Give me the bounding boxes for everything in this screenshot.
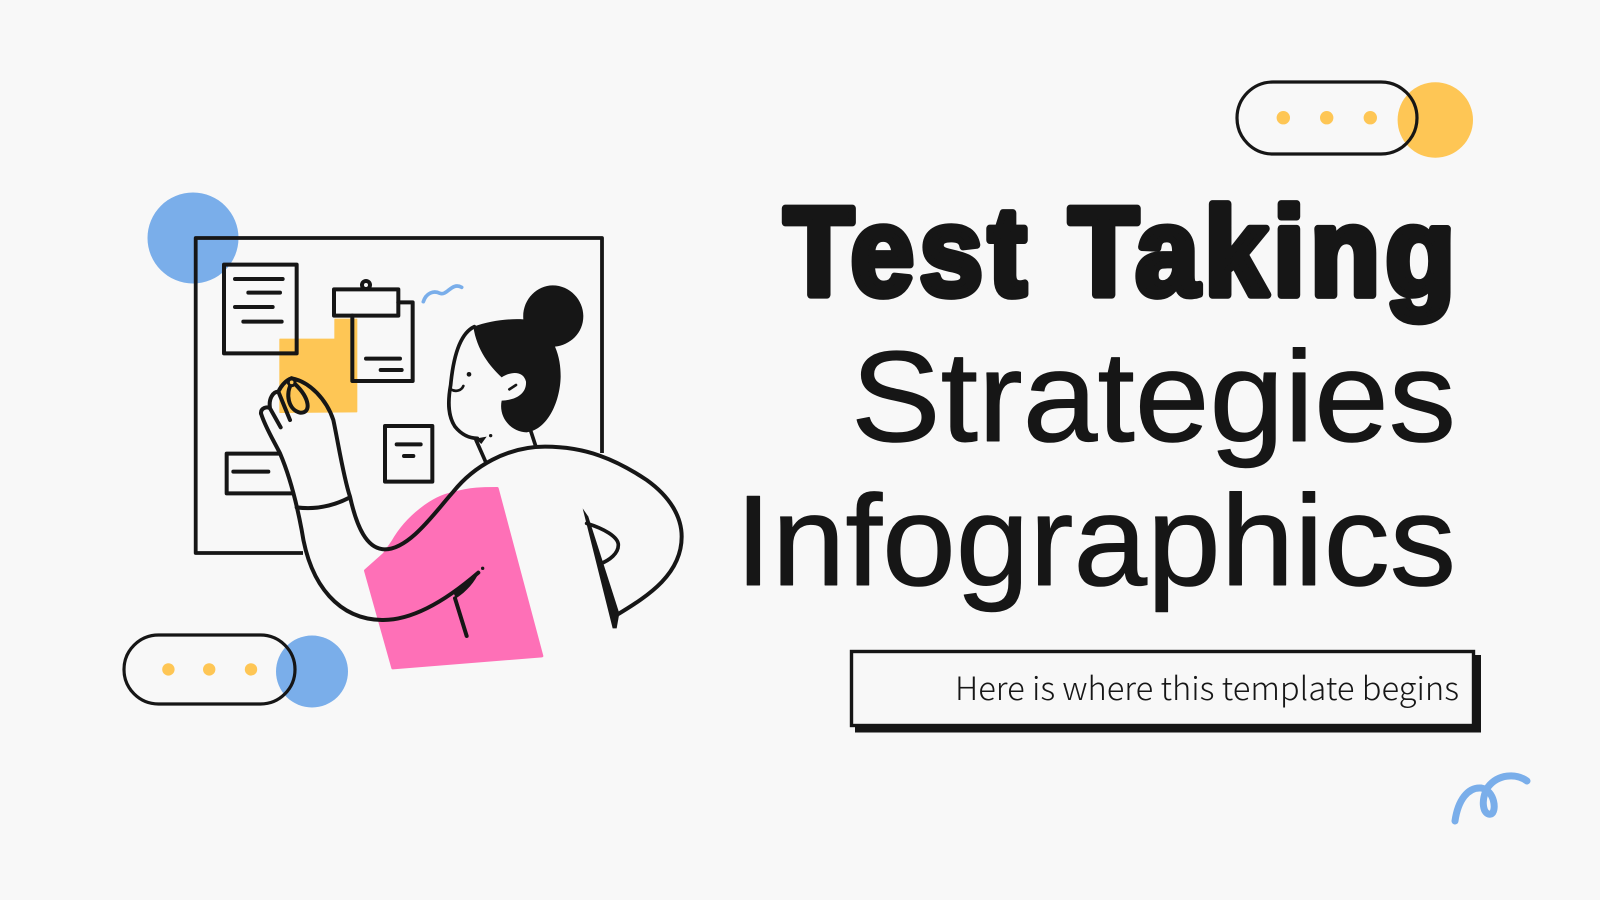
decoration: bottom blue circle <box>276 636 348 708</box>
decoration: bottom pill with dots <box>124 635 295 704</box>
sleeve thick end <box>453 572 479 598</box>
squiggle: blue wave <box>423 286 462 302</box>
title line: Strategies: Strategies <box>851 325 1456 469</box>
sleeve cuff <box>297 498 349 508</box>
note: clipboard <box>334 281 413 381</box>
back sliver <box>583 508 619 628</box>
decoration: top yellow circle <box>1398 82 1473 158</box>
face outline <box>449 327 477 438</box>
outer arm outline <box>261 413 478 620</box>
fingers <box>261 378 292 427</box>
thumb loop <box>288 383 308 413</box>
illustration: woman at planning board <box>148 192 682 668</box>
back and inner arm outline <box>292 378 682 615</box>
title line: Infographics: Infographics <box>735 469 1456 613</box>
face details <box>451 372 516 444</box>
decoration: top pill with dots <box>1237 82 1417 154</box>
thumb tip <box>288 379 295 386</box>
note: document with lines <box>224 265 297 353</box>
squiggle: blue curl bottom right <box>1455 776 1527 821</box>
board frame <box>196 238 602 553</box>
elbow fold <box>587 523 618 564</box>
yellow sticky shape <box>280 319 357 412</box>
neck <box>476 432 536 463</box>
title line: Test Taking: Test Taking <box>784 183 1455 322</box>
shirt fold line <box>455 598 467 636</box>
hair <box>473 285 583 432</box>
icon: blue circle behind board <box>148 192 238 284</box>
pink shirt panel <box>365 488 542 668</box>
subtitle box <box>852 652 1481 732</box>
title <box>735 183 1456 613</box>
note: small square card <box>385 426 432 482</box>
sleeve dot <box>481 567 484 570</box>
subtitle text: Here is where this template begins <box>955 664 1459 710</box>
note: wide card behind arm <box>227 454 292 493</box>
figure: woman <box>261 285 682 636</box>
